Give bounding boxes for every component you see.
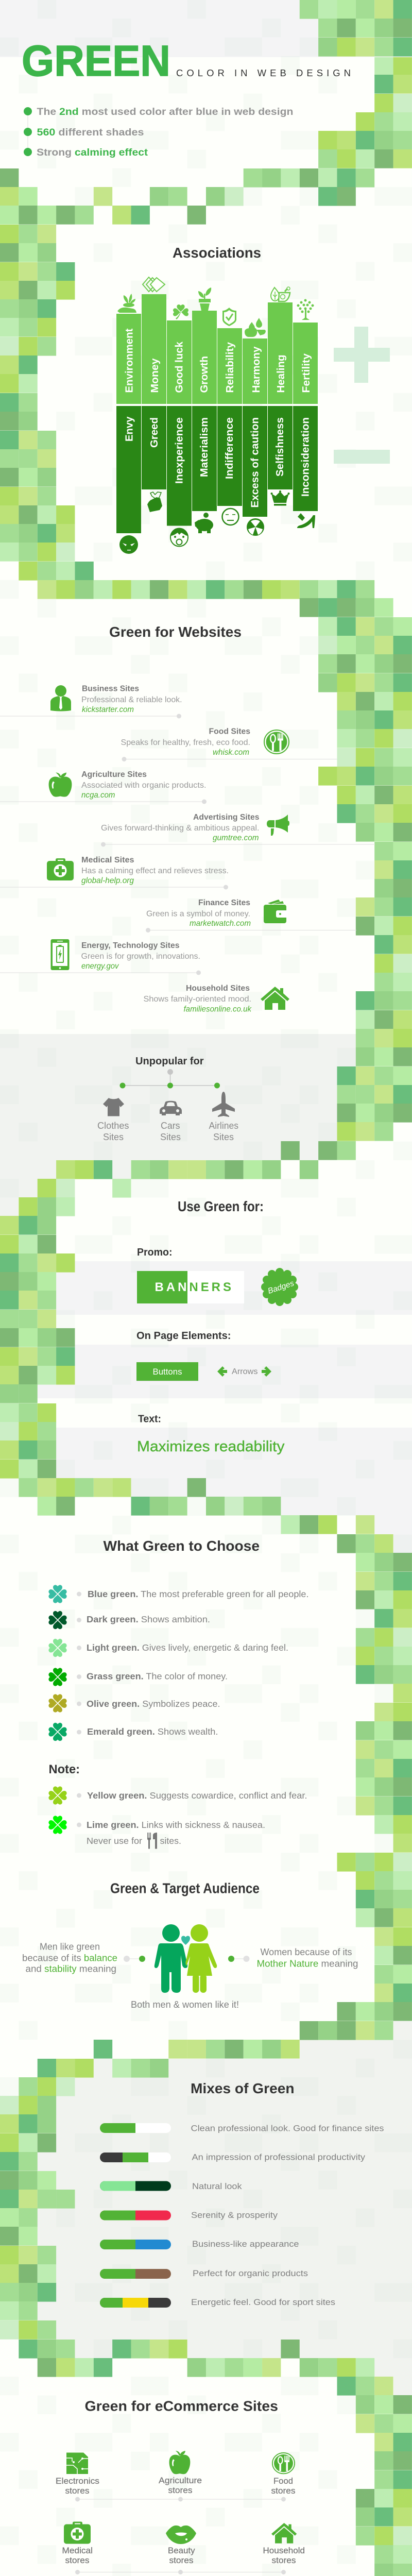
food stores <box>271 2453 296 2496</box>
item: food sites: Speaks for healthy, fresh, eco food. <box>121 738 250 747</box>
icon: money bills <box>143 277 165 292</box>
electronics stores: stores <box>65 2486 90 2496</box>
agriculture stores: Agriculture <box>159 2476 202 2485</box>
icon: indifferent face <box>222 509 239 525</box>
men text: because of its balance <box>22 1953 117 1963</box>
key facts list: 560 different shades <box>37 127 144 138</box>
item: finance sites: Green is a symbol of money. <box>146 910 250 918</box>
agriculture stores <box>159 2451 202 2495</box>
item: agriculture sites: Agriculture Sites <box>81 770 147 779</box>
positive labels: Harmony <box>251 346 262 393</box>
panel: promo <box>137 1247 298 1306</box>
labels: Sites <box>103 1132 124 1142</box>
electronics stores: Electronics <box>56 2477 99 2486</box>
icon: crown <box>271 490 289 506</box>
item: finance sites <box>146 899 288 928</box>
yellow green text: Yellow green. Suggests cowardice, conflict and fear. <box>87 1790 307 1801</box>
title <box>22 37 351 85</box>
panel: on page elements <box>136 1330 271 1381</box>
icon: shoe and tag <box>297 513 315 528</box>
icon: radiation sign <box>247 518 264 536</box>
negative labels <box>124 416 311 508</box>
item: agriculture sites: ncga.com <box>81 791 115 800</box>
icon: yellow green clover <box>48 1786 67 1805</box>
icon: shield with check <box>222 308 236 326</box>
negative labels: Inexperience <box>174 417 185 484</box>
mix: green yellow dark: Energetic feel. Good for sport sites <box>191 2297 335 2307</box>
arrows sample: Arrows <box>232 1367 258 1376</box>
mix: green blue <box>100 2239 299 2249</box>
icon: dark green clover <box>48 1611 67 1629</box>
household stores <box>263 2523 305 2565</box>
button sample <box>136 1362 198 1381</box>
on page elements gray strip <box>0 1345 412 1398</box>
blue green text: Blue green. The most preferable green for all people. <box>88 1589 309 1599</box>
positive labels: Growth <box>199 356 210 393</box>
women text: Women because of its <box>261 1947 352 1957</box>
list: shades of green <box>48 1585 309 1849</box>
title: COLOR IN WEB DESIGN <box>176 67 351 78</box>
item: energy technology sites <box>50 939 200 971</box>
heading: use green for: Use Green for: <box>178 1198 264 1214</box>
item: agriculture sites: Associated with organic products. <box>81 781 206 790</box>
icon: lime green clover <box>48 1816 67 1834</box>
icon: emerald green clover <box>48 1723 67 1741</box>
negative labels: Inconsideration <box>300 417 311 497</box>
item: household sites <box>143 984 289 1014</box>
heading: what green to choose: What Green to Choose <box>103 1538 260 1554</box>
men text: and stability meaning <box>26 1964 116 1974</box>
heading: green for websites: Green for Websites <box>109 624 242 640</box>
women text <box>256 1947 358 1969</box>
household stores: stores <box>272 2556 296 2565</box>
item: advertising sites <box>101 813 289 842</box>
negative labels: Indifference <box>224 417 235 479</box>
panel: mixes <box>100 2123 384 2308</box>
badge sample <box>261 1268 298 1306</box>
positive labels: Reliability <box>225 342 236 393</box>
dark green text: Dark green. Shows ambition. <box>87 1614 210 1624</box>
olive green text: Olive green. Symbolizes peace. <box>87 1699 220 1709</box>
panel: promo: Promo: <box>137 1247 172 1258</box>
icon: envy face <box>119 535 138 554</box>
labels <box>97 1121 238 1142</box>
right connector <box>228 1956 249 1962</box>
item: medical sites: Has a calming effect and relieves stress. <box>81 867 229 875</box>
household stores: Household <box>263 2546 305 2555</box>
negative labels: Excess of caution <box>249 417 261 508</box>
negative labels: Greed <box>149 417 160 448</box>
icon: airplane <box>212 1092 235 1117</box>
icon: decorative plus and minus <box>334 327 390 464</box>
panel: text: Maximizes readability <box>137 1438 285 1455</box>
item: energy technology sites: Energy, Technology Sites <box>81 941 180 950</box>
heading: associations: Associations <box>173 245 261 261</box>
icon: shirt <box>103 1098 124 1116</box>
item: advertising sites: gumtree.com <box>213 834 259 842</box>
labels: Airlines <box>209 1121 238 1131</box>
chart: positive and negative associations <box>116 277 318 554</box>
item: food sites: Food Sites <box>209 727 250 736</box>
icon: heart <box>181 1936 190 1945</box>
item: business sites <box>50 684 182 714</box>
positive labels <box>124 328 312 393</box>
item: advertising sites: Gives forward-thinking & ambitious appeal. <box>101 824 260 833</box>
mix: green red <box>100 2210 278 2221</box>
labels: Clothes <box>97 1121 129 1131</box>
medical stores: Medical <box>62 2546 93 2555</box>
food stores: stores <box>271 2486 296 2496</box>
mix: green brown <box>100 2268 308 2279</box>
positive labels: Good luck <box>174 341 185 393</box>
key facts list <box>24 107 294 158</box>
panel: on page elements: On Page Elements: <box>136 1330 231 1342</box>
unpopular gray band <box>0 1034 360 1216</box>
key facts list: The 2nd most used color after blue in web design <box>37 107 294 117</box>
panel: ecommerce store types <box>56 2451 305 2574</box>
mix: green blue: Business-like appearance <box>192 2239 299 2249</box>
panel: target audience <box>22 1924 358 2010</box>
icon: hand with money <box>147 492 162 512</box>
icon: light green clover <box>48 1639 67 1657</box>
mix: green red: Serenity & prosperity <box>191 2210 278 2220</box>
beauty stores: stores <box>169 2556 194 2565</box>
positive bars <box>116 294 318 404</box>
icon: baby with pacifier <box>170 529 188 546</box>
icon: clover leaf <box>173 304 188 319</box>
mix: dark green white: An impression of professional productivity <box>192 2153 366 2162</box>
electronics stores <box>56 2452 99 2496</box>
item: food sites <box>121 727 289 757</box>
banner sample: BANNERS <box>154 1280 231 1294</box>
header gray band <box>0 0 412 57</box>
both text: Both men & women like it! <box>131 1999 239 2010</box>
icon: man figure <box>154 1924 187 1993</box>
item: medical sites: Medical Sites <box>81 856 134 865</box>
icon: olive green clover <box>48 1694 67 1713</box>
positive labels: Money <box>149 358 161 393</box>
labels: Sites <box>213 1132 234 1142</box>
agriculture stores: stores <box>168 2486 193 2495</box>
emerald green text: Emerald green. Shows wealth. <box>87 1726 218 1737</box>
icon: blue green clover <box>48 1585 67 1603</box>
item: business sites: Professional & reliable look. <box>81 696 182 704</box>
heading: mixes of green: Mixes of Green <box>191 2080 295 2096</box>
negative labels: Selfishness <box>274 417 286 477</box>
positive labels: Fertility <box>301 353 312 393</box>
women text: Mother Nature meaning <box>256 1959 358 1969</box>
beauty stores <box>166 2526 196 2565</box>
mix: dark green white <box>100 2153 366 2162</box>
labels: Cars <box>161 1121 180 1131</box>
grass green text: Grass green. The color of money. <box>87 1671 228 1682</box>
never use for food note: sites. <box>160 1836 181 1846</box>
mix: green white <box>100 2123 384 2133</box>
icon: candles <box>245 318 266 337</box>
heading: green for ecommerce sites: Green for eCommerce Sites <box>84 2398 278 2414</box>
positive labels: Environment <box>124 328 135 393</box>
text gray band <box>0 1428 412 1553</box>
item: advertising sites: Advertising Sites <box>193 813 260 822</box>
item: food sites: whisk.com <box>213 748 249 757</box>
icon: plant pot <box>198 287 211 311</box>
panel: unpopular for: Unpopular for <box>135 1056 204 1067</box>
key facts list: Strong calming effect <box>37 147 148 158</box>
food stores: Food <box>273 2477 293 2486</box>
medical stores: stores <box>65 2556 90 2565</box>
men text: Men like green <box>40 1941 100 1952</box>
promo gray strip <box>0 1261 412 1315</box>
item: household sites: familiesonline.co.uk <box>183 1005 252 1014</box>
panel: text <box>137 1414 285 1455</box>
item: medical sites: global-help.org <box>81 876 134 885</box>
item: business sites: kickstarter.com <box>82 705 134 714</box>
item: business sites: Business Sites <box>82 684 139 693</box>
item: energy technology sites: energy.gov <box>81 962 119 971</box>
item: medical sites <box>47 856 229 885</box>
mix: green yellow dark <box>100 2297 335 2308</box>
mixes gray band <box>0 2021 412 2395</box>
icon: car <box>160 1101 182 1115</box>
arrows sample <box>217 1366 271 1377</box>
labels: Sites <box>160 1132 181 1142</box>
never use for food note <box>87 1833 181 1849</box>
negative labels: Materialism <box>199 417 210 477</box>
panel: text: Text: <box>138 1414 161 1425</box>
banner sample <box>137 1271 244 1303</box>
item: household sites: Household Sites <box>186 984 250 993</box>
light green text: Light green. Gives lively, energetic & daring feel. <box>87 1642 288 1653</box>
mix: green white: Clean professional look. Good for finance sites <box>191 2124 384 2133</box>
note heading: Note: <box>48 1762 80 1776</box>
mix: light green dark <box>100 2181 242 2191</box>
item: finance sites: Finance Sites <box>198 899 250 907</box>
site types timeline <box>0 684 375 1014</box>
mix: light green dark: Natural look <box>192 2181 242 2191</box>
title: GREEN <box>22 37 170 85</box>
never use for food note: Never use for <box>87 1836 142 1846</box>
button sample: Buttons <box>152 1367 182 1377</box>
icon: hand and plant <box>117 294 136 313</box>
panel: unpopular for <box>97 1056 238 1142</box>
item: energy technology sites: Green is for growth, innovations. <box>81 952 200 961</box>
item: household sites: Shows family-oriented mood. <box>143 995 251 1004</box>
men text <box>22 1941 117 1974</box>
heading: green and target audience: Green & Target Audience <box>110 1880 260 1896</box>
beauty stores: Beauty <box>168 2546 195 2555</box>
negative bars <box>116 406 318 533</box>
negative labels: Envy <box>124 416 135 442</box>
icon: woman figure <box>185 1924 217 1993</box>
icon: piggy bank <box>195 513 213 533</box>
mix: green brown: Perfect for organic products <box>193 2268 308 2278</box>
icon: tree <box>297 299 314 320</box>
positive labels: Healing <box>276 354 287 393</box>
medical stores <box>62 2521 93 2565</box>
badge sample: Badges <box>267 1279 295 1296</box>
item: finance sites: marketwatch.com <box>190 919 251 928</box>
item: agriculture sites <box>49 770 206 800</box>
icon: mortar and drop <box>271 287 290 301</box>
icon: grass green clover <box>48 1668 67 1686</box>
left connector <box>124 1956 145 1962</box>
lime green text: Lime green. Links with sickness & nausea. <box>87 1820 265 1830</box>
